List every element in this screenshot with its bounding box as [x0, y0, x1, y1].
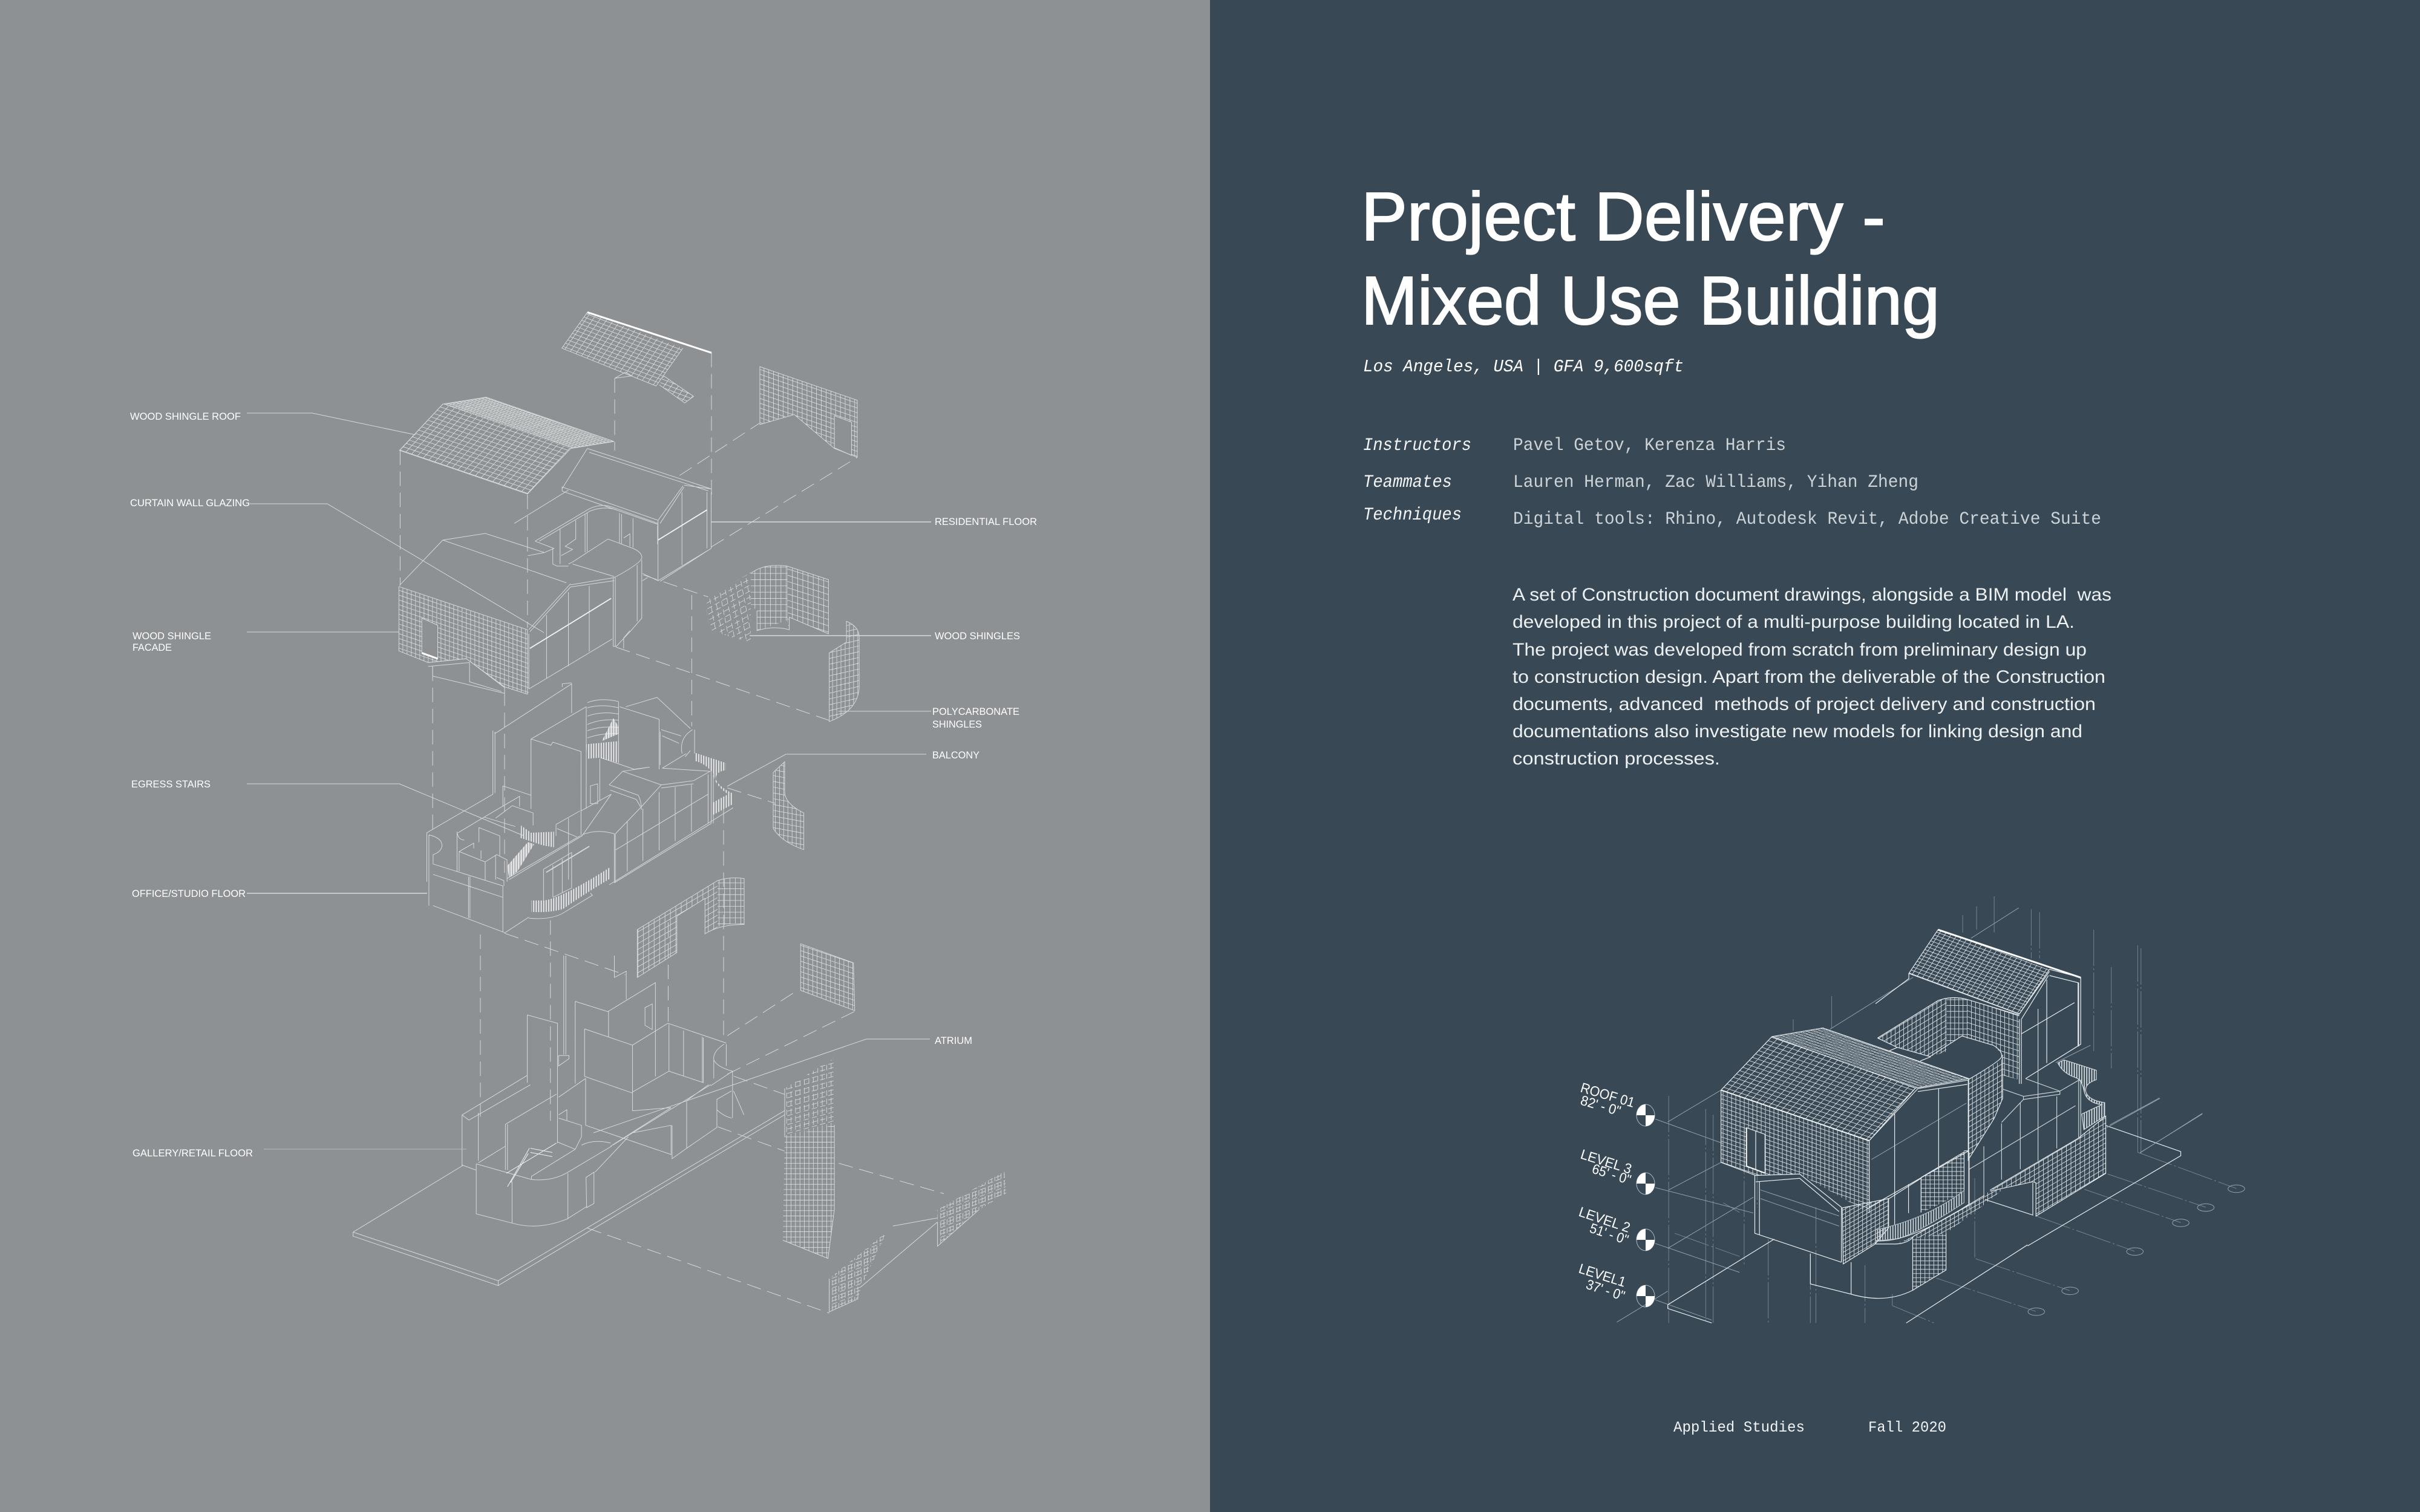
gallery retail floor: [462, 956, 744, 1226]
title: Project Delivery -: [1361, 178, 1885, 255]
rear of building: [1791, 820, 2202, 1362]
curved slab shingle band: [1846, 1057, 2055, 1375]
project description paragraph: documentations also investigate new models for linking design and: [1512, 722, 2082, 741]
upper rear roof piece: [561, 311, 711, 403]
front of building: [1587, 896, 2245, 1396]
callout: wood shingle facade: [132, 630, 399, 653]
callout: egress stairs: EGRESS STAIRS: [131, 778, 211, 790]
instructors: [1363, 435, 1786, 456]
level marker: level 3: LEVEL 3: [1579, 1146, 1634, 1177]
callout: polycarbonate shingles: SHINGLES: [932, 719, 982, 730]
site projection lines: [2107, 1098, 2202, 1153]
panel: right dark slate background: [1210, 0, 2420, 1512]
bottom right jagged shingle panel: [769, 1095, 1052, 1390]
wall and slab linework: [399, 486, 711, 689]
callout: wood shingle facade: FACADE: [132, 642, 172, 653]
subtitle: location and area: Los Angeles, USA | GFA 9,600sqft: [1363, 357, 1684, 377]
exploded axonometric drawing: [263, 213, 1052, 1390]
front glazed wall: [1869, 1080, 1969, 1207]
rear roof: [1791, 852, 2137, 1090]
callout: wood shingles: WOOD SHINGLES: [935, 630, 1020, 642]
callout: residential floor: RESIDENTIAL FLOOR: [935, 516, 1037, 527]
canopy and lower storefront: [1755, 1174, 1912, 1299]
office studio floor: [427, 683, 865, 1152]
callout: wood shingle roof: WOOD SHINGLE ROOF: [130, 411, 241, 422]
right long shingle wall: [1938, 977, 2167, 1362]
project description paragraph: documents, advanced methods of project delivery and construction: [1512, 694, 2096, 714]
callout: egress stairs: [131, 778, 524, 836]
office walls and structure: [427, 683, 733, 933]
main wood shingle roof: [1587, 954, 2073, 1224]
curved recess shingle wall: [1833, 1078, 2053, 1289]
project description paragraph: construction processes.: [1512, 749, 1720, 769]
lower panels and site plate: [353, 806, 1052, 1390]
project description paragraph: A set of Construction document drawings, alongside a BIM model was: [1512, 585, 2111, 605]
level marker: level 2: [1577, 1204, 1655, 1251]
callout: wood shingle facade: WOOD SHINGLE: [132, 630, 211, 642]
teammates: Lauren Herman, Zac Williams, Yihan Zheng: [1513, 472, 1918, 493]
site plate: [353, 1110, 785, 1286]
title: [1361, 178, 1940, 339]
wood shingle facade: [398, 586, 529, 694]
teammates: Teammates: [1363, 472, 1452, 493]
polycarbonate shingles panel: [829, 621, 860, 722]
gallery walls: [462, 956, 744, 1226]
callout: balcony: [727, 749, 979, 786]
panel: left grey background: [0, 0, 1210, 1512]
level marker: roof 01: ROOF 01: [1579, 1080, 1637, 1110]
footer: studio and term: [1673, 1419, 1946, 1436]
level marker: level 3: [1579, 1146, 1655, 1194]
curved courtyard shingle wall: [1808, 820, 2096, 1240]
dashed explosion lines upper: [400, 353, 857, 873]
callout: balcony: BALCONY: [932, 749, 979, 761]
main level volume and residential floor: [399, 400, 938, 817]
footer: studio and term: Fall 2020: [1868, 1419, 1946, 1436]
techniques: Digital tools: Rhino, Autodesk Revit, Adobe Creative Suite: [1513, 509, 2101, 530]
site plate left: [1668, 1239, 2027, 1323]
instructors: Pavel Getov, Kerenza Harris: [1513, 435, 1786, 456]
techniques: [1363, 505, 2101, 530]
level marker: level 1: [1577, 1260, 1655, 1307]
level marker: level 2: LEVEL 2: [1577, 1204, 1632, 1236]
level marker: level 1: LEVEL1: [1577, 1260, 1628, 1290]
glazing mullion lines: [530, 510, 707, 648]
level marker: level 2: 51' - 0": [1588, 1220, 1630, 1248]
teammates: [1363, 472, 1918, 493]
project description paragraph: [1512, 585, 2111, 769]
callout: curtain wall glazing: [130, 497, 544, 633]
residential roof slab edge: [562, 448, 711, 495]
ground floor shingle pier: [1819, 1159, 2039, 1370]
stair hatching: [507, 718, 618, 878]
credits block: [1363, 435, 2101, 530]
level marker: roof 01: [1579, 1080, 1655, 1126]
techniques: Techniques: [1363, 505, 1462, 526]
dashed explosion lines lower: [480, 809, 944, 1313]
level and projection lines: [1617, 908, 2203, 1322]
grid bubbles: [2028, 1185, 2245, 1315]
atrium stair strokes: [506, 1143, 557, 1187]
wood shingle roof: [399, 397, 615, 495]
instructors: Instructors: [1363, 435, 1471, 456]
project description paragraph: to construction design. Apart from the deliverable of the Construction: [1512, 667, 2105, 687]
gallery level shingle panel: [715, 806, 938, 1144]
balcony railing hatching: [531, 752, 732, 912]
rounded shingle wall: [1881, 909, 2089, 1305]
callout: polycarbonate shingles: POLYCARBONATE: [932, 706, 1019, 717]
wood shingle panel, inverted u: [540, 703, 865, 1152]
column grid lines: [1669, 896, 2236, 1323]
callout: curtain wall glazing: CURTAIN WALL GLAZING: [130, 497, 250, 509]
level marker: level 1: 37' - 0": [1584, 1276, 1627, 1304]
callout: atrium: [594, 1035, 972, 1133]
tall shingle panel: [698, 955, 920, 1321]
balcony railing: [1876, 1190, 1964, 1241]
level marker: level 3: 65' - 0": [1591, 1161, 1633, 1188]
rear balcony hatching: [2058, 1060, 2105, 1130]
right wing slab: [1969, 1009, 2081, 1209]
footer: studio and term: Applied Studies: [1673, 1419, 1805, 1436]
balcony curved panel: [773, 761, 805, 850]
roof and shingle pieces upper: [263, 213, 950, 971]
callout: polycarbonate shingles: [839, 706, 1019, 730]
rear shingle wall panel: [760, 367, 858, 458]
project description paragraph: The project was developed from scratch from preliminary design up: [1512, 640, 2087, 660]
main wood shingle wall with door: [1689, 1008, 1901, 1291]
callout: office studio floor: OFFICE/STUDIO FLOOR: [132, 888, 246, 899]
callout: gallery retail floor: GALLERY/RETAIL FLOOR: [132, 1147, 253, 1159]
callout: wood shingle roof: [130, 411, 416, 435]
title: Mixed Use Building: [1361, 262, 1940, 339]
site plate right: [2027, 1126, 2181, 1246]
wood shingles curved panel: [572, 400, 938, 817]
curved slab edge: [1876, 1196, 1984, 1244]
rear gable wall: [2019, 969, 2081, 1084]
lower corner shingle wall: [1761, 1065, 1973, 1396]
callout: atrium: ATRIUM: [935, 1035, 972, 1046]
project description paragraph: developed in this project of a multi-purpose building located in LA.: [1512, 612, 2075, 632]
assembled building axonometric: [1587, 820, 2245, 1396]
rounded block top: [1930, 1036, 2002, 1080]
level marker: roof 01: 82' - 0": [1579, 1092, 1623, 1119]
